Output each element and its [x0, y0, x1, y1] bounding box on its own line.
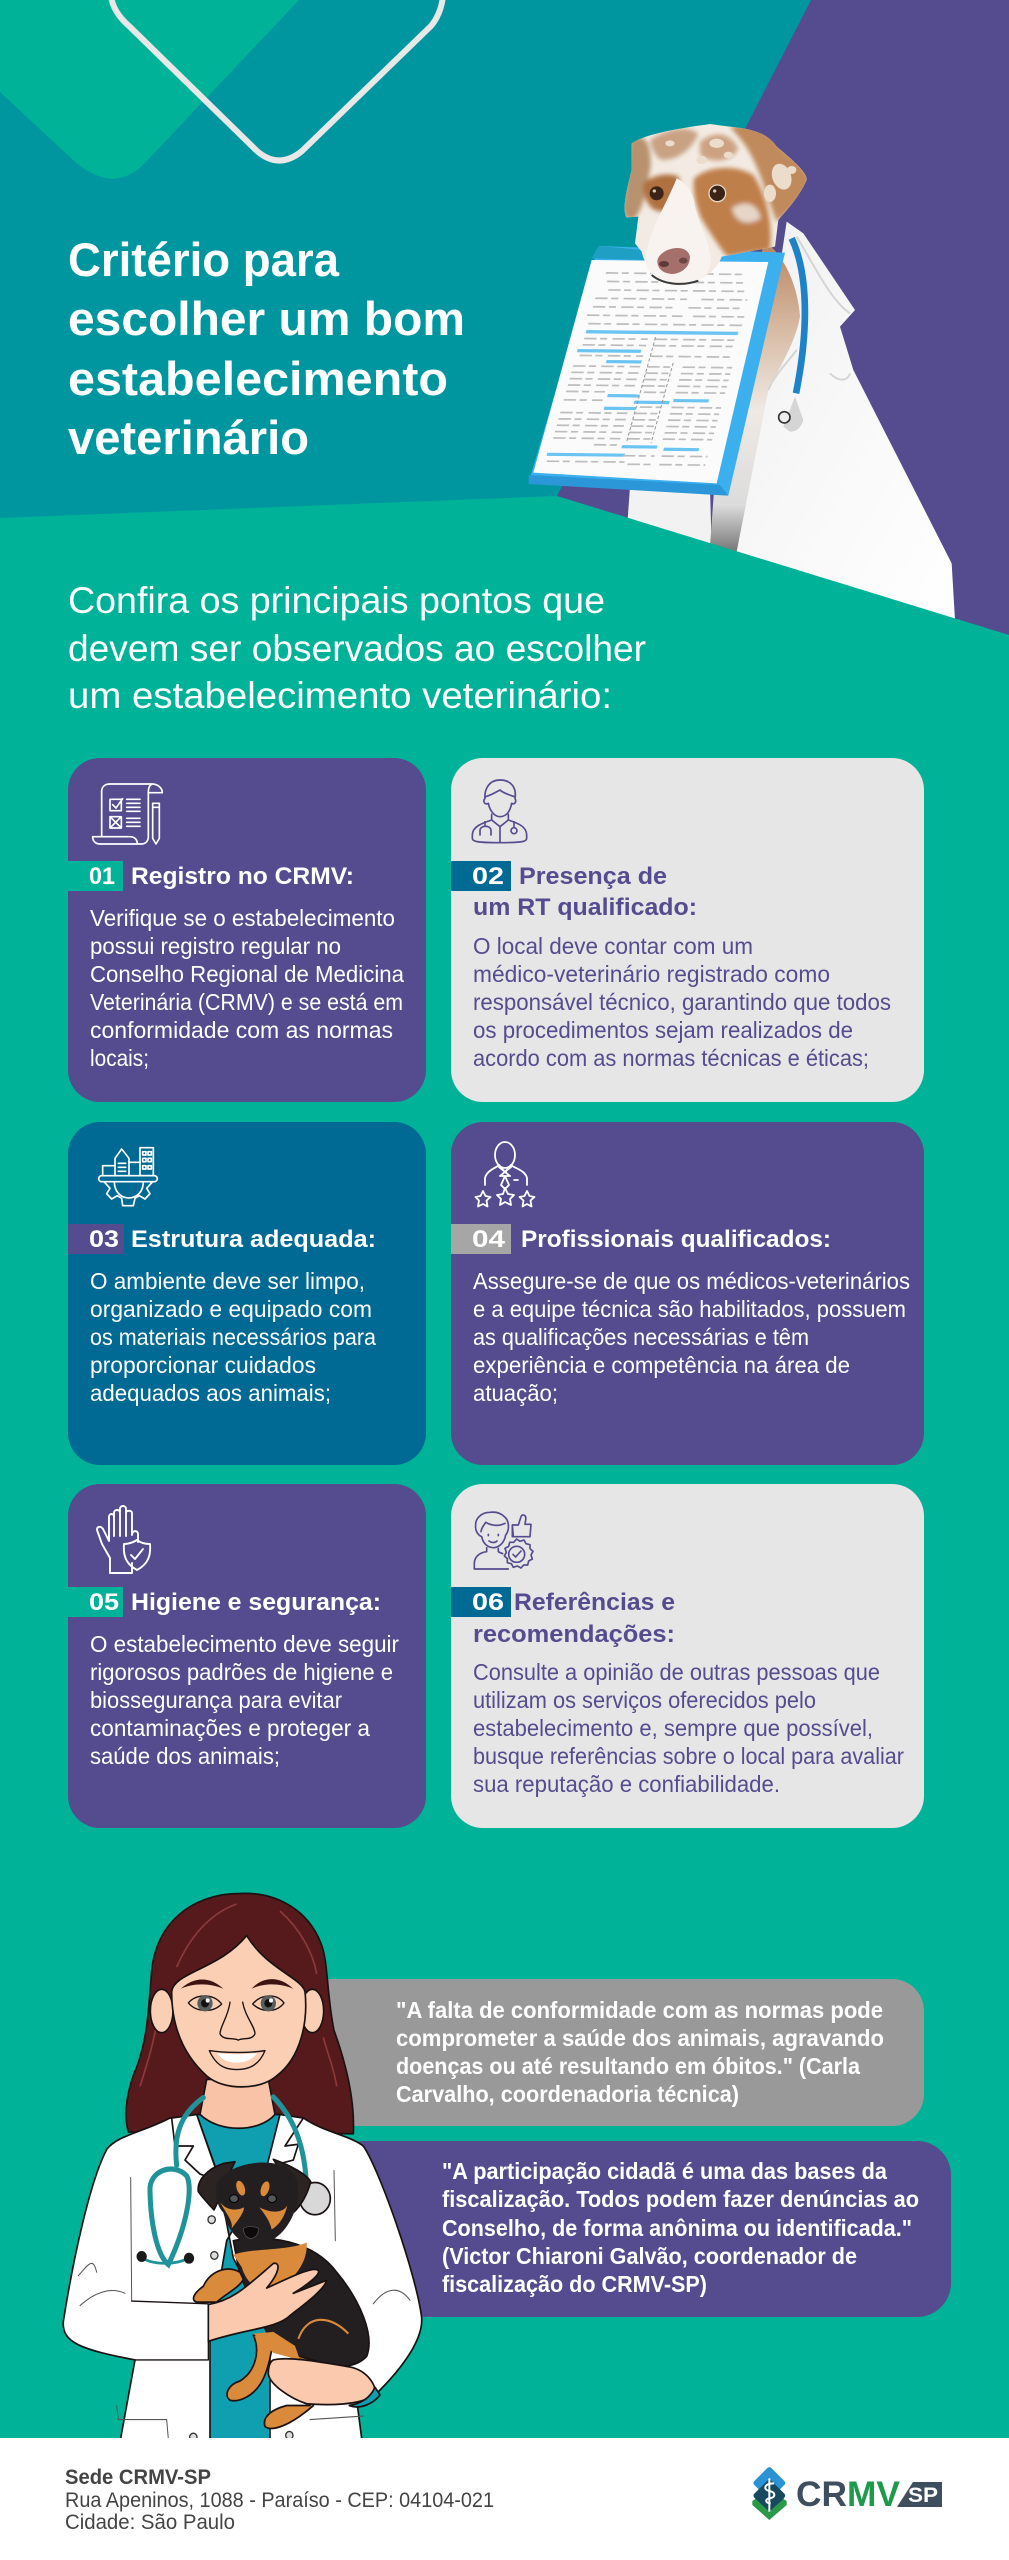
- heading 04: 04: [472, 1226, 506, 1253]
- heading 01: 01: [89, 863, 115, 890]
- stethoscope: [139, 2097, 306, 2265]
- main title: [68, 233, 465, 464]
- head fur patches: [622, 125, 809, 257]
- heading 02: 02: [472, 863, 504, 890]
- eyes: [188, 1995, 284, 2011]
- background: purple wedge: [557, 0, 1009, 640]
- heading 06: 06: [472, 1589, 504, 1616]
- heading 06: [472, 1589, 675, 1648]
- footer address: [65, 2466, 494, 2534]
- quote text 1: Carvalho, coordenadoria técnica): [396, 2081, 739, 2107]
- dog head: [622, 124, 809, 286]
- body text 05: O estabelecimento deve seguir: [90, 1631, 399, 1657]
- logo SP tag: [897, 2482, 942, 2507]
- puppy head: [216, 2163, 298, 2245]
- body text 02: responsável técnico, garantindo que todos: [473, 989, 891, 1015]
- background: green main area: [0, 496, 1009, 2440]
- body text 02: acordo com as normas técnicas e éticas;: [473, 1045, 869, 1071]
- body text 04: e a equipe técnica são habilitados, possuem: [473, 1296, 906, 1322]
- heading 02: Presença de: [519, 863, 667, 890]
- lapels: [172, 2114, 303, 2181]
- smile: [209, 2051, 265, 2070]
- panel: 02 presença de RT: [451, 758, 924, 1102]
- puppy lower legs: [227, 2334, 273, 2401]
- puppy body: [233, 2238, 369, 2366]
- logo shield: [752, 2466, 787, 2520]
- heading 03: Estrutura adequada:: [131, 1226, 376, 1253]
- body text 05: rigorosos padrões de higiene e: [90, 1659, 393, 1685]
- body text 05: saúde dos animais;: [90, 1743, 280, 1769]
- body text 01: locais;: [90, 1045, 149, 1071]
- heading 02: [472, 863, 697, 921]
- quote text 2: "A participação cidadã é uma das bases da: [442, 2158, 887, 2184]
- heading 01: Registro no CRMV:: [131, 863, 354, 890]
- quote text 2: (Victor Chiaroni Galvão, coordenador de: [442, 2243, 857, 2269]
- quote text 1: "A falta de conformidade com as normas pode: [396, 1997, 883, 2023]
- body text 03: adequados aos animais;: [90, 1380, 331, 1406]
- quote bubble: Victor Chiaroni Galvão: [330, 2141, 951, 2317]
- main title: Critério para: [68, 233, 340, 286]
- panel: 05 higiene e segurança: [68, 1484, 426, 1828]
- clipboard form lines: [544, 273, 758, 465]
- coat fold shading: [768, 237, 850, 390]
- quote text 1: doenças ou até resultando em óbitos." (Carla: [396, 2053, 860, 2079]
- panel: 04 profissionais qualificados: [451, 1122, 924, 1465]
- body text 01: Veterinária (CRMV) e se está em: [90, 989, 403, 1015]
- body text 01: Conselho Regional de Medicina: [90, 961, 404, 987]
- dog chest fur: [710, 240, 800, 552]
- body text 04: as qualificações necessárias e têm: [473, 1324, 809, 1350]
- intro text: um estabelecimento veterinário:: [68, 675, 612, 716]
- puppy front paw: [193, 2269, 243, 2302]
- main title: escolher um bom: [68, 292, 465, 345]
- panel: 01 registro no CRMV: [68, 758, 426, 1102]
- body text 06: sua reputação e confiabilidade.: [473, 1771, 780, 1797]
- face: [172, 1936, 306, 2087]
- body text 03: organizado e equipado com: [90, 1296, 372, 1322]
- hair: [126, 1893, 354, 2134]
- body text 05: [90, 1631, 399, 1769]
- icon: checklist scroll: [93, 784, 162, 844]
- body text 03: proporcionar cuidados: [90, 1352, 316, 1378]
- intro text: devem ser observados ao escolher: [68, 628, 646, 669]
- body text 01: possui registro regular no: [90, 933, 341, 959]
- stethoscope chest piece: [779, 397, 803, 432]
- logo text: CRMV: [796, 2475, 901, 2514]
- body text 01: [90, 905, 404, 1071]
- quote text 1: comprometer a saúde dos animais, agravando: [396, 2025, 884, 2051]
- body text 03: os materiais necessários para: [90, 1324, 376, 1350]
- number tag 01: [68, 861, 123, 891]
- main title: estabelecimento: [68, 352, 448, 405]
- puppy eyes: [230, 2195, 276, 2202]
- quote text 2: fiscalização do CRMV-SP): [442, 2271, 707, 2297]
- clipboard: [529, 246, 785, 496]
- ears: [150, 1989, 324, 2033]
- eyebrows: [181, 1979, 293, 1989]
- body text 02: O local deve contar com um: [473, 933, 753, 959]
- footer address: Rua Apeninos, 1088 - Paraíso - CEP: 04104-021: [65, 2489, 494, 2512]
- puppy chest: [233, 2242, 307, 2291]
- logo SP text: SP: [908, 2484, 938, 2507]
- heading 06: Referências e: [514, 1589, 675, 1616]
- puppy ears: [198, 2162, 235, 2210]
- left sleeve seam: [132, 2301, 208, 2360]
- icon: professional with stars: [476, 1142, 534, 1206]
- background: teal header: [0, 0, 1009, 720]
- number tag 02: [451, 861, 511, 891]
- body text 02: [473, 933, 891, 1071]
- heading 06: recomendações:: [473, 1621, 675, 1648]
- stethoscope chest piece: [300, 2182, 330, 2215]
- body text 06: busque referências sobre o local para avaliar: [473, 1743, 904, 1769]
- body text 04: atuação;: [473, 1380, 558, 1406]
- icon: buildings on gear: [99, 1148, 157, 1206]
- heading 04: Profissionais qualificados:: [521, 1226, 831, 1253]
- coat fold lines: [78, 2171, 410, 2439]
- puppy tan markings: [220, 2179, 287, 2229]
- body text 06: [473, 1659, 904, 1797]
- footer address: Cidade: São Paulo: [65, 2511, 235, 2534]
- number tag 03: [68, 1224, 124, 1254]
- body text 04: experiência e competência na área de: [473, 1352, 850, 1378]
- body text 01: Verifique se o estabelecimento: [90, 905, 395, 931]
- body text 05: contaminações e proteger a: [90, 1715, 370, 1741]
- lower hand: [268, 2359, 375, 2405]
- panel: 06 referências e recomendações: [451, 1484, 924, 1828]
- head speckles: [665, 139, 796, 202]
- footer address: Sede CRMV-SP: [65, 2466, 211, 2489]
- body text 04: [473, 1268, 910, 1406]
- body text 04: Assegure-se de que os médicos-veterinários: [473, 1268, 910, 1294]
- heading 03: 03: [89, 1226, 119, 1253]
- logo CRMV-SP: [752, 2466, 942, 2520]
- cuff: [349, 2387, 380, 2407]
- scrubs: [197, 2114, 280, 2451]
- quote text 2: Conselho, de forma anônima ou identificada.": [442, 2215, 912, 2241]
- upper hand: [208, 2263, 327, 2341]
- muzzle: [645, 178, 711, 286]
- decorative green rounded diamond: [0, 0, 299, 179]
- heading 05: 05: [89, 1589, 119, 1616]
- quote text 1: [396, 1997, 884, 2107]
- number tag 05: [68, 1587, 123, 1617]
- nose: [220, 2002, 255, 2040]
- illustration: vet woman holding puppy: [63, 1893, 422, 2451]
- body text 06: utilizam os serviços oferecidos pelo: [473, 1687, 816, 1713]
- puppy: [193, 2159, 369, 2428]
- coat lower left panel: [627, 487, 712, 550]
- dog lab coat: [727, 222, 955, 620]
- body text 05: biossegurança para evitar: [90, 1687, 342, 1713]
- body text 03: [90, 1268, 376, 1406]
- panel: 03 estrutura adequada: [68, 1122, 426, 1465]
- number tag 04: [451, 1224, 511, 1254]
- intro text: [68, 580, 646, 716]
- hair highlights: [140, 1904, 337, 2086]
- icon: doctor: [472, 780, 527, 843]
- number tag 06: [451, 1587, 511, 1617]
- quote text 2: [442, 2158, 919, 2297]
- decorative white diamond outline: [111, 0, 443, 160]
- mouth line: [652, 275, 698, 284]
- footer background: [0, 2438, 1009, 2560]
- body text 06: Consulte a opinião de outras pessoas que: [473, 1659, 880, 1685]
- lab coat: [63, 2118, 422, 2451]
- icon: person with thumb and badge: [474, 1512, 533, 1569]
- eyes: [650, 186, 664, 200]
- heading 05: Higiene e segurança:: [131, 1589, 381, 1616]
- body text 01: conformidade com as normas: [90, 1017, 393, 1043]
- body text 02: médico-veterinário registrado como: [473, 961, 830, 987]
- nose: [657, 248, 690, 274]
- puppy nose: [243, 2227, 259, 2239]
- illustration: dog in lab coat holding clipboard: [529, 124, 955, 620]
- stethoscope tube: [792, 238, 805, 393]
- quote bubble: Carla Carvalho: [300, 1979, 924, 2126]
- coat buttons: [190, 2216, 293, 2441]
- body text 02: os procedimentos sejam realizados de: [473, 1017, 853, 1043]
- main title: veterinário: [68, 411, 309, 464]
- neck: [200, 2079, 275, 2128]
- icon: hand with shield: [97, 1506, 150, 1573]
- heading 02: um RT qualificado:: [473, 894, 697, 921]
- body text 03: O ambiente deve ser limpo,: [90, 1268, 365, 1294]
- body text 06: estabelecimento e, sempre que possível,: [473, 1715, 873, 1741]
- quote text 2: fiscalização. Todos podem fazer denúncias ao: [442, 2186, 919, 2212]
- intro text: Confira os principais pontos que: [68, 580, 605, 621]
